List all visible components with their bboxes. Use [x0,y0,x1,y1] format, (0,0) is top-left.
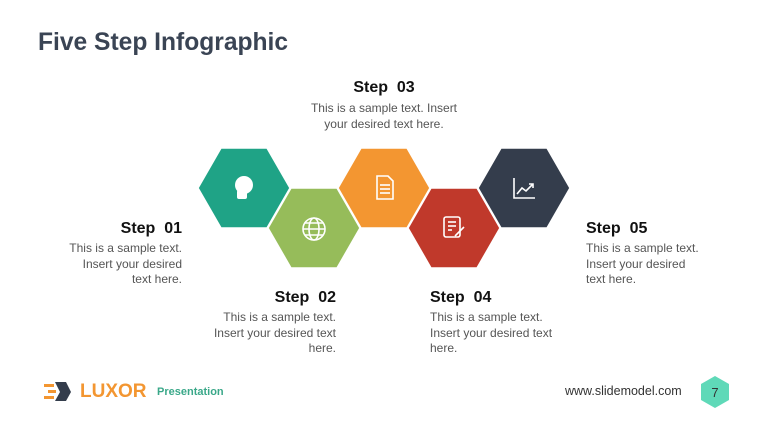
step 05 text [586,220,699,286]
step 05 text: Insert your desired [586,256,685,270]
page number badge [701,376,729,408]
step 02 text: This is a sample text. [223,310,336,324]
step 05 text: This is a sample text. [586,241,699,255]
logo icon [44,382,71,401]
step 04 text: here. [430,341,457,355]
step 02 text: Step 02 [275,289,336,306]
step 01 text: Insert your desired [83,256,182,270]
icon: edit note [444,217,464,237]
icon: globe [303,218,325,240]
step 04 text: Insert your desired text [430,326,552,340]
step 02 text [214,289,336,355]
step 02 text: Insert your desired text [214,326,336,340]
icon: document [377,176,393,199]
hexagon 4 red [408,188,500,268]
step 03 text: your desired text here. [324,116,444,130]
hexagon 1 teal [198,148,290,228]
step 05 text: Step 05 [586,220,647,237]
icon: head [235,176,253,199]
step 03 text: Step 03 [353,79,415,96]
title: Five Step Infographic [38,29,288,56]
icon: chart [514,178,535,198]
page number badge: 7 [711,385,719,400]
step 02 text: here. [309,341,336,355]
step 01 text [69,220,182,286]
step 04 text: This is a sample text. [430,310,543,324]
step 01 text: Step 01 [121,220,182,237]
step 04 text: Step 04 [430,289,491,306]
step 04 text [430,289,552,355]
presentation label: Presentation [157,386,224,398]
step 01 text: text here. [132,272,182,286]
logo text: LUXOR [80,381,146,402]
step 03 text: This is a sample text. Insert [311,101,457,115]
website: www.slidemodel.com [565,384,682,398]
step 05 text: text here. [586,272,636,286]
step 01 text: This is a sample text. [69,241,182,255]
hexagon 3 orange [338,148,430,228]
hexagon 2 green [268,188,360,268]
step 03 text [311,79,457,130]
hexagon 5 dark [478,148,570,228]
